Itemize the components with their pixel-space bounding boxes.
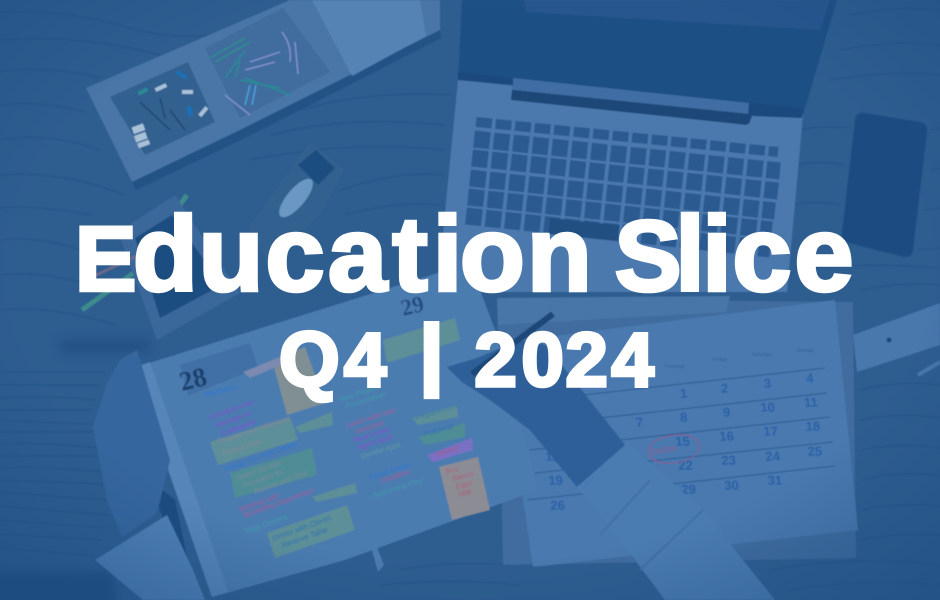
handwritten notes: Milk: [457, 487, 474, 499]
calendar dates: 1: [679, 385, 688, 401]
calendar dates: 22: [678, 457, 693, 473]
calendar board: [497, 296, 856, 565]
calendar dates: 18: [805, 418, 821, 434]
calendar sheet: Doctor: [650, 443, 677, 457]
handwritten notes: Swimming Pool: [372, 475, 424, 500]
handwritten notes: Followup: [423, 421, 454, 439]
handwritten notes: Colleagues: [220, 417, 258, 438]
title: lice: [675, 196, 853, 314]
handwritten notes: Pickup Car from Dealer: [223, 439, 299, 474]
calendar dates: 17: [763, 423, 778, 439]
calendar dates: 8: [679, 409, 688, 425]
calendar weekdays: Sunday: [797, 348, 815, 354]
date 28: 28: [176, 361, 210, 397]
handwritten notes: Meditation: [203, 382, 239, 399]
title: E: [75, 208, 136, 310]
icon: laptop: [440, 0, 837, 292]
handwritten notes: Manager to: [214, 408, 252, 430]
calendar dates: 7: [635, 414, 644, 430]
handwritten notes: Yoga Classes: [243, 512, 289, 536]
calendar dates: 29: [681, 481, 696, 497]
subtitle: Q: [279, 315, 340, 403]
calendar dates: 9: [722, 404, 731, 420]
handwritten notes: Presentation: [344, 389, 387, 411]
calendar weekdays: Friday: [713, 357, 728, 363]
date 29: 29: [398, 291, 427, 321]
handwritten notes: Agent Appt.: [355, 431, 396, 452]
handwritten notes: Marketing Department: [242, 486, 315, 520]
calendar dates: 12: [545, 448, 560, 464]
clips: [210, 32, 298, 115]
calendar dates: 16: [719, 428, 734, 444]
calendar dates: 25: [807, 443, 823, 459]
calendar dates: 24: [765, 448, 781, 464]
subtitle: 4: [344, 318, 386, 403]
right hand, pen and sleeve: [447, 314, 775, 600]
handwritten notes: Lunch with new: [345, 405, 397, 430]
calendar dates: 10: [760, 399, 775, 415]
handwritten notes: Real Estate: [352, 424, 392, 445]
keyboard rows: [466, 122, 780, 249]
handwritten notes: Select Service: [235, 458, 283, 483]
title: ducation: [133, 196, 592, 314]
handwritten notes: Dentist Appt.: [360, 439, 403, 461]
calendar dates: 19: [548, 472, 563, 488]
handwritten notes: Review and Test: [253, 468, 308, 496]
handwritten notes: Buy: [444, 464, 460, 476]
handwritten notes: Upload: [434, 443, 460, 459]
handwritten notes: Investors: [354, 418, 386, 436]
calendar dates: 26: [550, 497, 565, 513]
calendar dates: 23: [721, 452, 736, 468]
calendar dates: 15: [675, 433, 690, 449]
handwritten notes: Eggs: [454, 478, 473, 491]
notebook planner: [133, 263, 538, 597]
subtitle: |: [421, 311, 442, 397]
icon: small pencil holder: [82, 195, 240, 340]
handwritten notes: Reserve Table: [281, 525, 329, 550]
calendar sheet: [500, 300, 858, 567]
subtitle: 2024: [474, 318, 654, 403]
handwritten notes: Introduce new: [208, 397, 256, 422]
handwritten notes: Providers for: [242, 467, 285, 490]
icon: wooden stationery tray: [86, 0, 441, 190]
calendar dates: 30: [724, 477, 739, 493]
calendar dates: 4: [806, 370, 815, 386]
handwritten notes: Deadline: [380, 467, 411, 485]
handwritten notes: Prepare new Milestone: [216, 414, 292, 446]
calendar weekdays: [664, 348, 815, 370]
handwritten notes: Project Plan: [221, 437, 262, 458]
dark desk shadows: [0, 340, 150, 600]
calendar dates: 31: [767, 472, 783, 488]
calendar weekdays: Thursday: [664, 364, 686, 370]
calendar weekdays: Saturday: [752, 352, 773, 358]
left hand and sleeve: [93, 350, 205, 600]
icon: smartphone: [842, 113, 927, 257]
title: S: [615, 200, 681, 312]
calendar dates: 11: [803, 394, 818, 410]
sticky notes: [210, 318, 490, 558]
icon: tape dispenser: [248, 142, 345, 262]
handwritten notes: [203, 382, 474, 550]
handwritten notes: New Project: [338, 383, 380, 404]
handwritten notes: Prepare Docs: [414, 400, 460, 423]
calendar dates: 3: [763, 375, 772, 391]
handwritten notes: Dinner with Clients: [271, 513, 333, 543]
handwritten notes: Bacon: [451, 469, 474, 483]
handwritten notes: Finish Report: [368, 459, 414, 482]
icon: ruler: [853, 303, 940, 375]
calendar dates: 2: [720, 380, 729, 396]
handwritten notes: Meeting with: [238, 491, 280, 514]
